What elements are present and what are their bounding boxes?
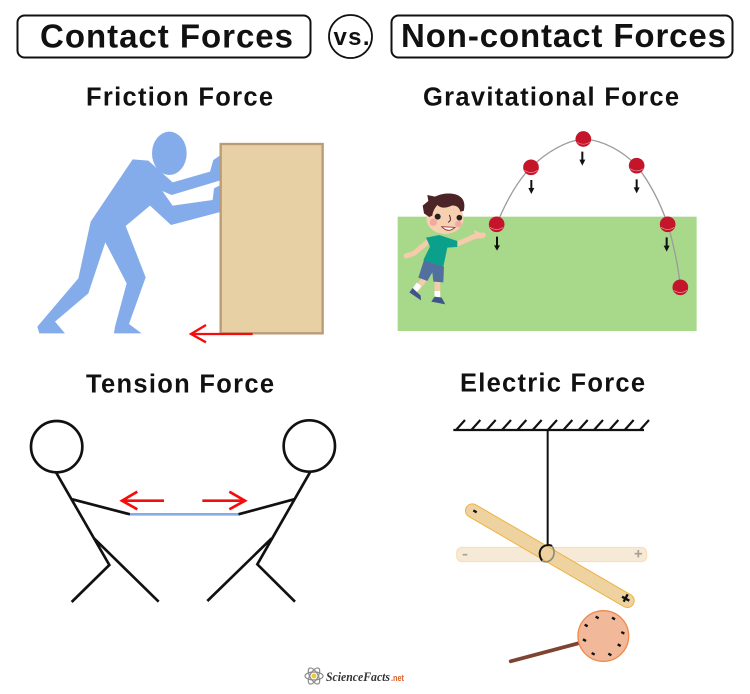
logo: Science Facts — [305, 666, 404, 686]
gravity arrows — [494, 152, 670, 252]
cheeks — [430, 219, 437, 226]
string and ring — [540, 430, 554, 562]
rope — [130, 510, 238, 518]
shoes — [409, 288, 421, 300]
heading: Contact Forces: Contact Forces — [40, 18, 293, 54]
charged sphere — [511, 611, 629, 661]
subheading: Electric Force: Electric Force — [460, 370, 645, 398]
vs. badge: vs. — [334, 24, 370, 51]
heading: Non-contact Forces: Non-contact Forces — [401, 17, 726, 54]
panel: electric force — [453, 420, 649, 661]
logo: Science Facts: .net — [391, 673, 404, 683]
tilted rod — [472, 511, 627, 601]
tension arrows — [122, 492, 245, 509]
panel: tension force — [31, 420, 335, 602]
arrow: friction — [191, 325, 253, 342]
ceiling — [453, 420, 649, 430]
subheading: Friction Force: Friction Force — [86, 84, 273, 112]
panel: friction force — [37, 132, 323, 342]
panel: gravitational force — [398, 131, 697, 331]
subheading: Tension Force: Tension Force — [86, 370, 274, 398]
box — [221, 144, 323, 333]
trajectory — [497, 139, 680, 287]
right figure — [207, 420, 335, 602]
vs. badge — [329, 15, 372, 58]
balls — [489, 131, 688, 295]
nose — [448, 215, 450, 222]
arms — [406, 240, 430, 256]
subheading: Gravitational Force: Gravitational Force — [423, 84, 679, 112]
hands — [474, 230, 485, 238]
logo: Science Facts: ScienceFacts — [326, 669, 390, 684]
icon: atom — [305, 666, 323, 686]
mouth — [442, 227, 455, 230]
eyes — [435, 214, 441, 220]
faded rod — [457, 547, 647, 562]
legs — [417, 278, 437, 297]
hair — [423, 194, 464, 217]
faded charges — [463, 550, 642, 557]
face — [426, 203, 464, 234]
shirt — [423, 235, 457, 267]
rod charges — [473, 510, 629, 602]
ground — [398, 217, 697, 331]
icon: boy throwing — [406, 194, 485, 304]
icon: person pushing — [37, 132, 222, 333]
left figure — [31, 421, 159, 602]
shorts — [418, 260, 444, 282]
